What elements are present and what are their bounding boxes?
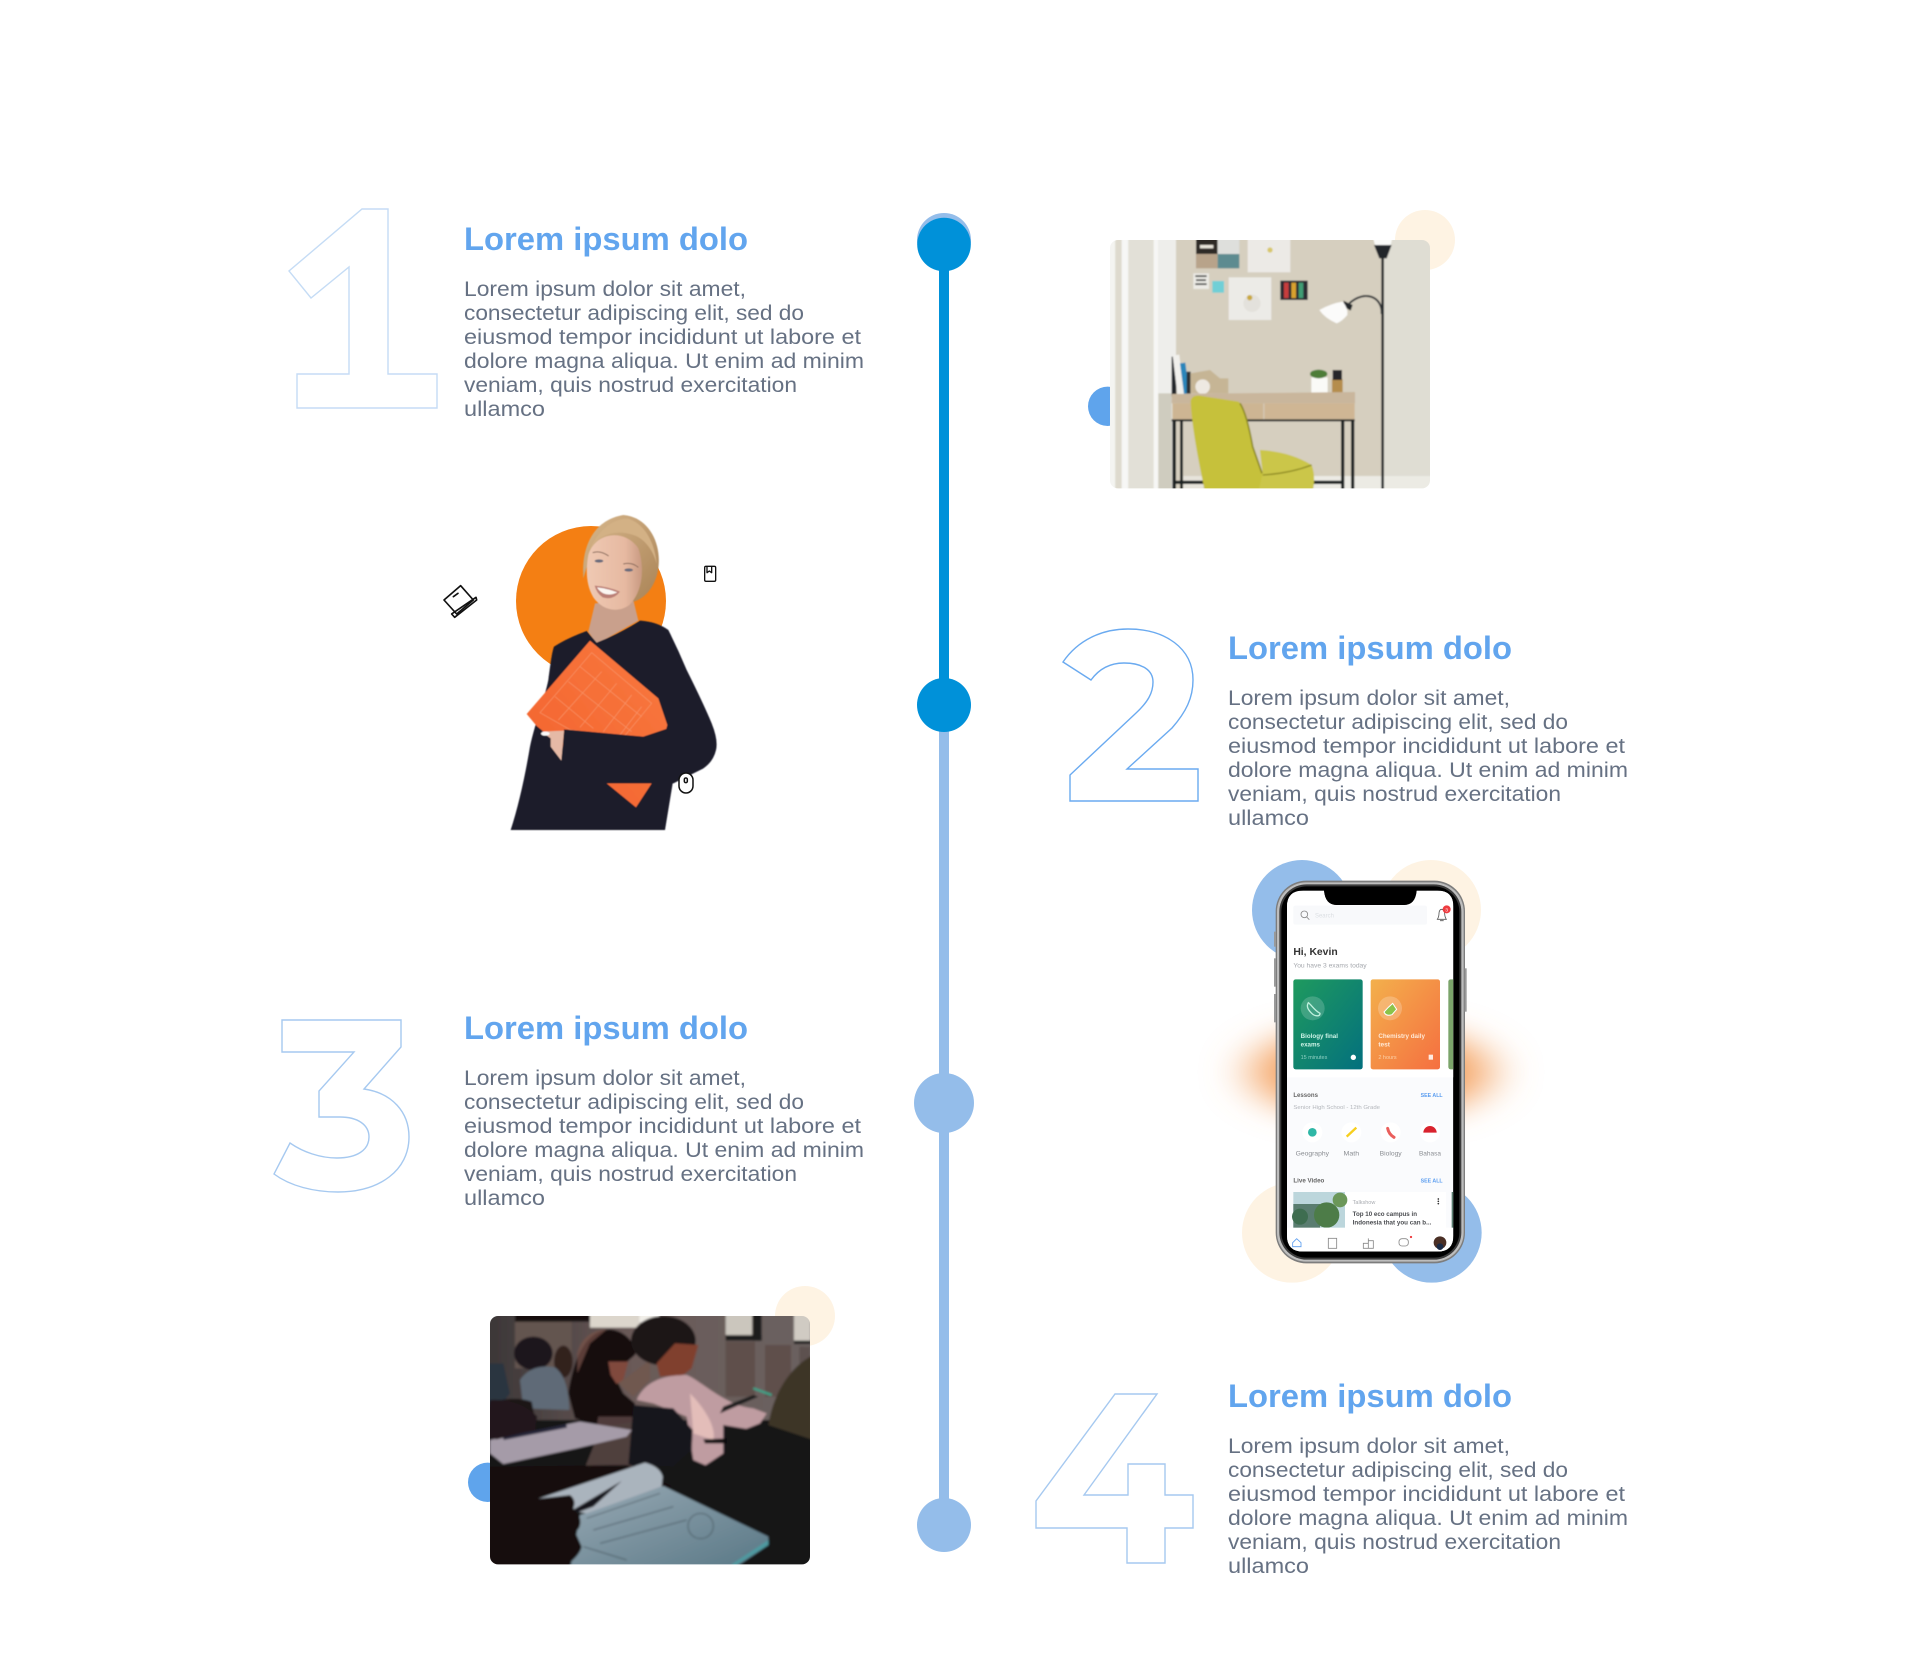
hair front xyxy=(584,518,657,572)
exam card: biology: Biology final xyxy=(1301,1033,1338,1040)
smile xyxy=(595,586,620,598)
orange circle xyxy=(516,526,666,676)
timeline node 4 xyxy=(917,1498,971,1552)
step 4 body text: Lorem ipsum dolor sit amet, xyxy=(1228,1435,1510,1458)
lesson: bahasa xyxy=(1420,1126,1441,1156)
neck and chest xyxy=(588,600,638,644)
step 2 heading: Lorem ipsum dolo xyxy=(1228,630,1512,666)
live video header xyxy=(1294,1178,1442,1182)
classroom photo xyxy=(483,1310,817,1573)
lesson: biology xyxy=(1380,1126,1402,1157)
step 1 body text: ullamco xyxy=(464,398,545,421)
phone notch xyxy=(1324,891,1417,905)
lesson: bahasa: Bahasa xyxy=(1419,1150,1441,1157)
step 1 heading: Lorem ipsum dolo xyxy=(464,221,748,257)
eyes and brows xyxy=(593,552,638,567)
step 2 body text: dolore magna aliqua. Ut enim ad minim xyxy=(1228,759,1628,782)
video card: Indonesia that you can b... xyxy=(1353,1220,1432,1227)
video card: Top 10 eco campus in xyxy=(1353,1211,1417,1218)
fingernail xyxy=(541,732,550,736)
phone mockup panel xyxy=(1242,860,1491,1283)
exam card: chemistry xyxy=(1371,979,1440,1069)
decorative blue circle top left xyxy=(1252,860,1352,960)
lesson: geography: Geography xyxy=(1296,1150,1330,1157)
video card xyxy=(1292,1192,1454,1232)
step 1 body text xyxy=(464,278,864,421)
step 3 heading: Lorem ipsum dolo xyxy=(464,1010,748,1046)
step 4 body text: ullamco xyxy=(1228,1555,1309,1578)
lessons header: Lessons xyxy=(1293,1093,1319,1099)
exam card: biology: 15 minutes xyxy=(1301,1055,1328,1061)
eye right xyxy=(624,568,633,572)
step 3 body text: dolore magna aliqua. Ut enim ad minim xyxy=(464,1139,864,1162)
lesson: math xyxy=(1344,1126,1359,1156)
exam card: biology xyxy=(1293,979,1363,1069)
timeline line: remaining part xyxy=(939,705,949,1525)
step 3 body text: veniam, quis nostrud exercitation xyxy=(464,1163,797,1186)
exam card: chemistry: 2 hours xyxy=(1378,1055,1397,1061)
decorative cream circle xyxy=(775,1286,835,1346)
step 1 body text: veniam, quis nostrud exercitation xyxy=(464,374,797,397)
step 1 body text: Lorem ipsum dolor sit amet, xyxy=(464,278,746,301)
timeline node 2 xyxy=(917,678,971,732)
exam card: chemistry: test xyxy=(1378,1042,1391,1049)
bottom tab bar xyxy=(1287,1228,1453,1252)
step 3 body text: Lorem ipsum dolor sit amet, xyxy=(464,1067,746,1090)
step 2 body text: Lorem ipsum dolor sit amet, xyxy=(1228,687,1510,710)
step 3 body text: eiusmod tempor incididunt ut labore et xyxy=(464,1115,861,1138)
step 4 body text xyxy=(1228,1435,1628,1578)
decorative blue circle bottom right xyxy=(1382,1183,1482,1283)
lesson: geography xyxy=(1296,1128,1329,1157)
step 2 body text: eiusmod tempor incididunt ut labore et xyxy=(1228,735,1625,758)
step 4 body text: eiusmod tempor incididunt ut labore et xyxy=(1228,1483,1625,1506)
decorative cream circle top right xyxy=(1381,860,1481,960)
folder grid pattern xyxy=(540,653,652,737)
outlined number 1 xyxy=(289,209,437,408)
outlined number 2 xyxy=(1063,629,1198,801)
notification bell xyxy=(1437,905,1451,921)
panel: step 2 xyxy=(1063,629,1628,830)
eye left xyxy=(595,559,603,563)
dark sweater xyxy=(511,621,717,830)
exam card: biology: exams xyxy=(1301,1042,1320,1049)
timeline node 3 xyxy=(914,1073,974,1133)
timeline node 1 xyxy=(917,213,971,271)
outlined number 4 xyxy=(1036,1394,1193,1563)
step 3 body text: ullamco xyxy=(464,1187,545,1210)
step 2 body text xyxy=(1228,687,1628,830)
exam card: partial third xyxy=(1448,979,1454,1070)
timeline line: completed part xyxy=(939,244,949,705)
step 1 body text: dolore magna aliqua. Ut enim ad minim xyxy=(464,350,864,373)
teeth xyxy=(597,587,617,594)
step 4 body text: veniam, quis nostrud exercitation xyxy=(1228,1531,1561,1554)
phone screen xyxy=(1287,891,1458,1252)
lessons header: SEE ALL xyxy=(1421,1093,1443,1099)
greeting xyxy=(1293,947,1367,969)
icon: mouse xyxy=(679,773,693,793)
step 4 body text: dolore magna aliqua. Ut enim ad minim xyxy=(1228,1507,1628,1530)
decorative blue circle xyxy=(468,1463,507,1502)
woman figure xyxy=(511,515,717,830)
exam card: chemistry: Chemistry daily xyxy=(1378,1033,1425,1040)
hair back xyxy=(583,515,659,602)
lesson: math: Math xyxy=(1343,1150,1360,1157)
step 1 body text: eiusmod tempor incididunt ut labore et xyxy=(464,326,861,349)
step 4 body text: consectetur adipiscing elit, sed do xyxy=(1228,1459,1568,1482)
photo panel: students in classroom xyxy=(468,1286,835,1573)
phone body xyxy=(1274,881,1467,1263)
lesson: biology: Biology xyxy=(1380,1150,1403,1157)
step 3 body text: consectetur adipiscing elit, sed do xyxy=(464,1091,804,1114)
icon: laptop xyxy=(444,586,477,617)
illustration panel: woman holding folder xyxy=(444,515,717,830)
step 4 heading: Lorem ipsum dolo xyxy=(1228,1378,1512,1414)
step 2 body text: veniam, quis nostrud exercitation xyxy=(1228,783,1561,806)
photo panel: study desk with yellow chair xyxy=(1088,210,1455,497)
live video header: SEE ALL xyxy=(1421,1178,1443,1184)
step 3 body text xyxy=(464,1067,864,1210)
greeting: You have 3 exams today xyxy=(1293,963,1367,969)
step 2 body text: consectetur adipiscing elit, sed do xyxy=(1228,711,1568,734)
timeline xyxy=(914,213,974,1552)
live video header: Live Video xyxy=(1293,1178,1325,1184)
decorative blue circle xyxy=(1088,387,1127,426)
search bar xyxy=(1300,910,1334,920)
decorative cream circle bottom left xyxy=(1242,1183,1342,1283)
greeting: Hi, Kevin xyxy=(1293,947,1338,958)
notification bell: 3 xyxy=(1445,907,1448,913)
panel: step 1 xyxy=(289,209,864,421)
lessons header: Senior High School - 12th Grade xyxy=(1293,1105,1380,1111)
outlined number 3 xyxy=(274,1020,409,1192)
infographic canvas xyxy=(273,208,1626,1573)
video card: Talkshow xyxy=(1353,1200,1375,1206)
search bar: Search xyxy=(1315,913,1334,919)
face xyxy=(587,535,642,610)
orange glow behind phone xyxy=(1251,1025,1491,1119)
icon: book xyxy=(705,566,716,581)
panel: step 4 xyxy=(1036,1378,1628,1578)
lessons header xyxy=(1293,1093,1443,1111)
sleeve xyxy=(562,726,716,783)
panel: step 3 xyxy=(274,1010,864,1210)
step 1 body text: consectetur adipiscing elit, sed do xyxy=(464,302,804,325)
desk photo xyxy=(1103,233,1437,497)
decorative cream circle xyxy=(1395,210,1455,270)
hand xyxy=(542,731,564,761)
step 2 body text: ullamco xyxy=(1228,807,1309,830)
orange folder xyxy=(527,641,667,807)
